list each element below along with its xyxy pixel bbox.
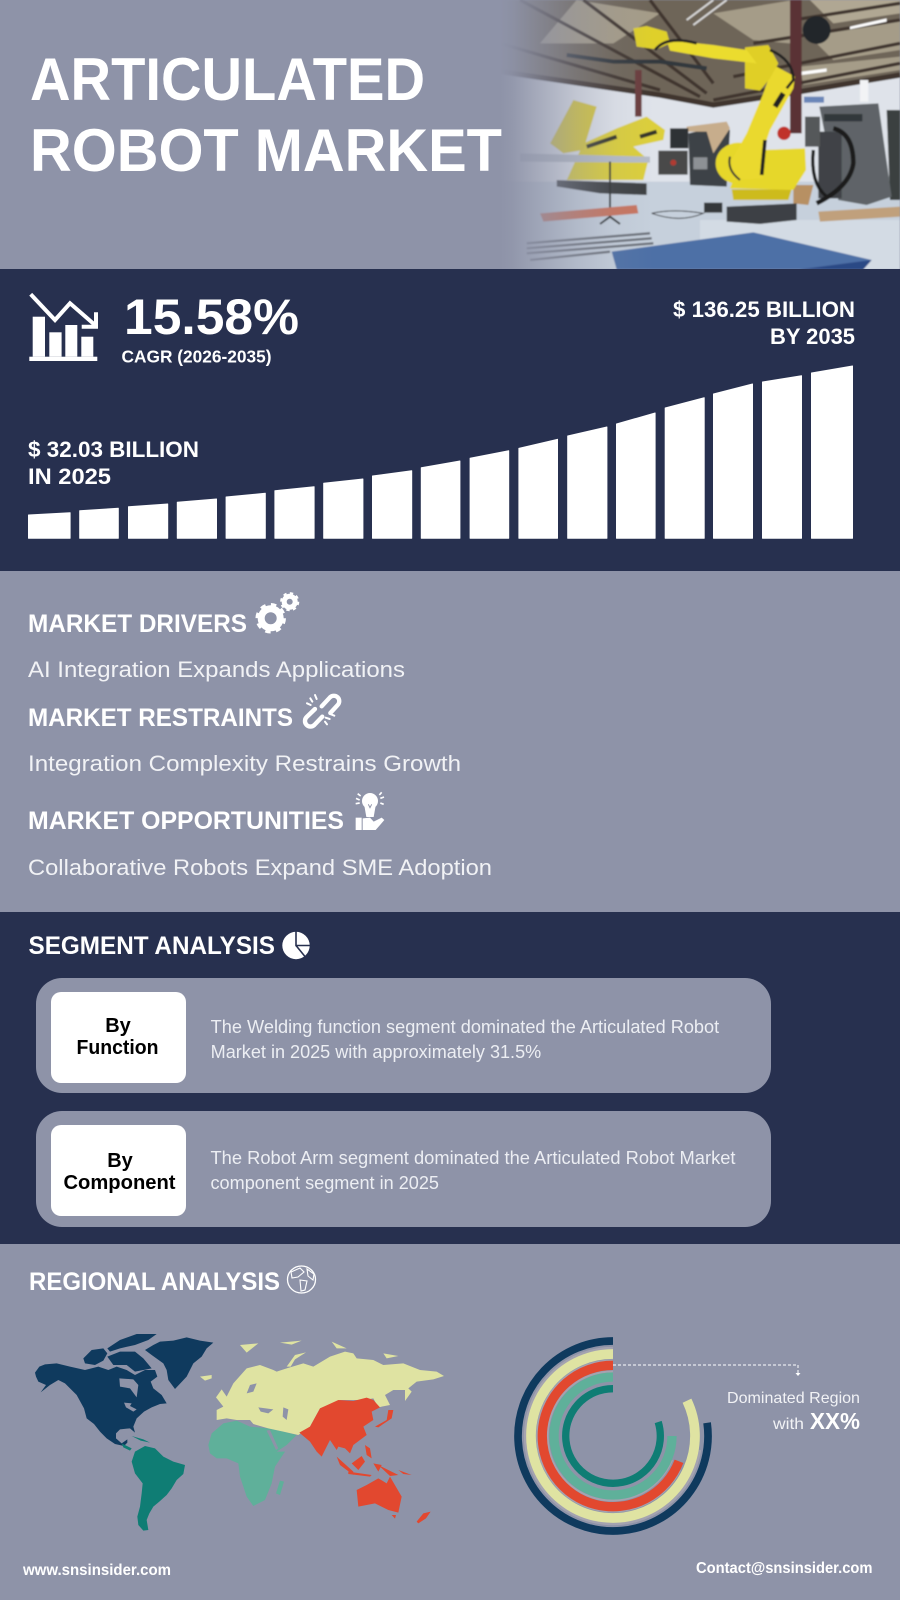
base value 2025 [28,437,199,489]
card: by component: The Robot Arm segment dominated the Articulated Robot Market [210,1148,736,1168]
base value 2025: IN 2025 [28,464,111,489]
panel: segment analysis [0,912,900,1244]
title [30,46,502,184]
forecast value 2035: $ 136.25 BILLION [673,297,855,322]
chart: concentric radial bars [518,1341,708,1531]
map: africa and middle east [208,1421,297,1506]
heading: market drivers: MARKET DRIVERS [28,610,247,638]
icon: globe [288,1266,316,1293]
footer: contact email: Contact@snsinsider.com [696,1560,872,1577]
card: by function: By [105,1015,132,1037]
card: by component: Component [64,1172,176,1194]
CAGR value: 15.58% [124,289,299,345]
title: ARTICULATED [30,46,425,113]
icon: broken chain [305,695,339,727]
icon: gears [257,593,298,632]
heading: segment analysis: SEGMENT ANALYSIS [28,932,275,960]
callout: dominated region: XX% [810,1408,860,1434]
arc: teal [566,1389,660,1483]
text: opportunity: Collaborative Robots Expand SME Adoption [28,855,492,880]
card: by function [36,978,771,1093]
footer: website: www.snsinsider.com [22,1562,171,1579]
card: by component [36,1111,771,1227]
icon: declining chart [29,294,97,361]
CAGR label: CAGR (2026-2035) [122,346,272,366]
photo: yellow articulated robot in factory [500,0,900,269]
card: by function: Market in 2025 with approximately 31.5% [211,1042,541,1062]
map: north america [35,1334,213,1446]
world map [35,1334,444,1531]
arc: navy [518,1341,708,1531]
callout: dominated region [727,1390,860,1434]
map: europe and north asia [200,1341,444,1435]
map: south america [122,1436,185,1531]
callout: dominated region: with [772,1416,804,1433]
forecast value 2035: BY 2035 [770,324,855,349]
callout: dominated region: Dominated Region [727,1390,860,1407]
text: restraint: Integration Complexity Restrains Growth [28,751,461,776]
text: driver: AI Integration Expands Applications [28,657,405,682]
base value 2025: $ 32.03 BILLION [28,437,199,462]
card: by component: component segment in 2025 [210,1173,439,1193]
arc: green [554,1377,672,1495]
title: ROBOT MARKET [30,117,502,184]
arc: red [542,1365,679,1507]
heading: market opportunities: MARKET OPPORTUNITIES [28,807,344,835]
icon: lightbulb in hand [356,792,384,830]
card: by component: By [107,1150,134,1172]
map: asia pacific [299,1398,431,1523]
heading: regional analysis: REGIONAL ANALYSIS [29,1268,280,1296]
panel: market drivers, restraints, opportunities [28,593,492,880]
icon: pie chart [282,930,311,959]
panel: market size and CAGR [0,269,900,571]
card: by function: Function [76,1037,158,1059]
heading: market restraints: MARKET RESTRAINTS [28,704,293,732]
forecast value 2035 [673,297,855,349]
callout arrow: dashed leader [613,1365,800,1376]
bar chart: market growth [28,366,852,538]
card: by function: The Welding function segment dominated the Articulated Robot [211,1017,719,1037]
arc: yellow [531,1354,695,1518]
